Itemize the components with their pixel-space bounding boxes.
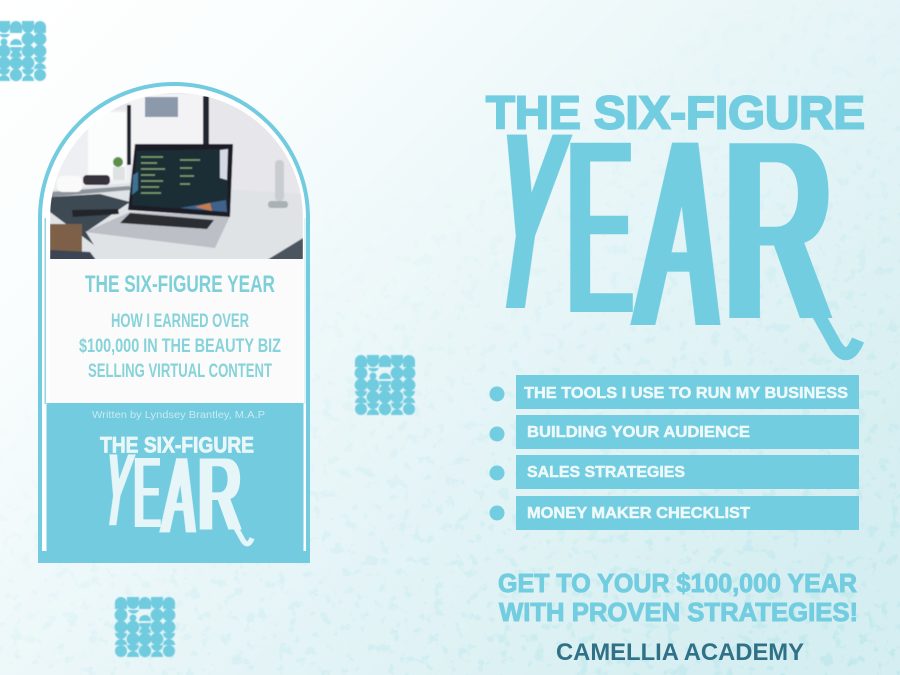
panel: book cover arch <box>38 84 310 563</box>
heading: large YEAR: A <box>634 87 726 382</box>
callout: proven strategies <box>498 568 858 627</box>
text block: cover subtitle: $100,000 IN THE BEAUTY BIZ <box>79 336 281 357</box>
icon: pattern tile top left <box>0 21 46 81</box>
heading: cover logo YEAR: Y <box>98 434 137 548</box>
panel: white title block <box>50 259 303 403</box>
photo: laptop on desk <box>50 90 303 260</box>
list item 3: SALES STRATEGIES <box>527 464 685 481</box>
heading: cover logo YEAR: A <box>161 435 199 555</box>
text: author byline: Written by Lyndsey Brantley, M.A.P <box>92 409 265 421</box>
callout: proven strategies: GET TO YOUR $100,000 YEAR <box>498 568 857 598</box>
heading: cover title: THE SIX-FIGURE YEAR <box>85 271 275 298</box>
list item 2 <box>490 415 859 449</box>
list item 1: THE TOOLS I USE TO RUN MY BUSINESS <box>524 385 848 402</box>
list item 1 <box>490 375 859 409</box>
heading: cover logo YEAR: E <box>134 437 160 549</box>
text block: cover subtitle <box>79 311 281 382</box>
list item 4: MONEY MAKER CHECKLIST <box>527 505 750 522</box>
heading: cover logo line: THE SIX-FIGURE <box>100 432 254 458</box>
heading: cover logo YEAR <box>98 434 252 555</box>
icon: pattern tile bottom <box>115 597 175 657</box>
list item 3 <box>490 455 859 489</box>
list item 2: BUILDING YOUR AUDIENCE <box>527 424 750 441</box>
heading: large YEAR: Y <box>478 82 576 362</box>
text: brand name: CAMELLIA ACADEMY <box>556 639 804 666</box>
icon: pattern tile centre <box>355 355 415 415</box>
list: topics <box>490 375 859 530</box>
list item 4 <box>490 496 859 530</box>
text block: cover subtitle: SELLING VIRTUAL CONTENT <box>88 361 272 382</box>
heading: large YEAR: R <box>726 88 831 372</box>
heading: large YEAR <box>478 82 858 382</box>
heading: large YEAR: E <box>568 89 631 365</box>
panel: blue author block <box>38 403 310 563</box>
heading: the six-figure: THE SIX-FIGURE <box>486 86 865 138</box>
callout: proven strategies: WITH PROVEN STRATEGIES! <box>499 597 858 627</box>
heading: cover logo YEAR: R <box>198 436 241 551</box>
text block: cover subtitle: HOW I EARNED OVER <box>111 311 249 332</box>
